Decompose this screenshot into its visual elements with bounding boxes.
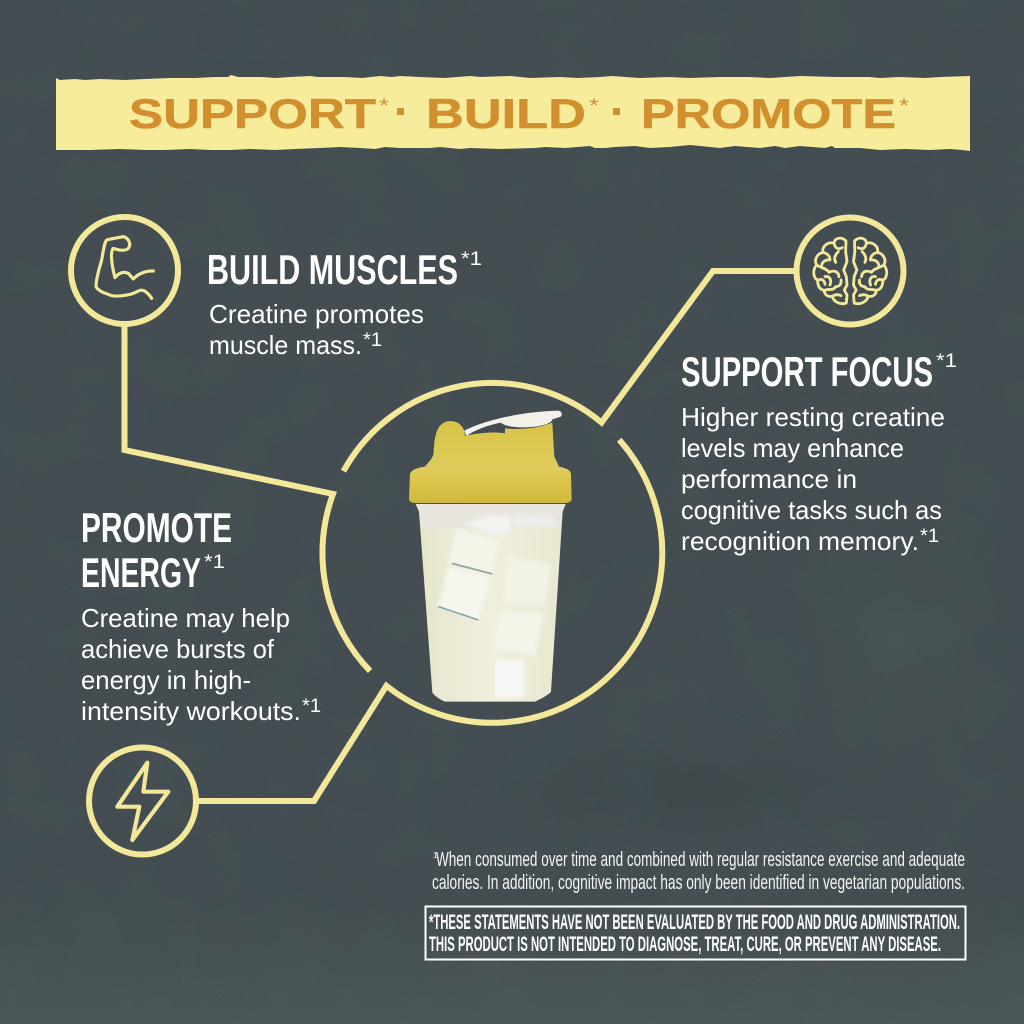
ice cubes bbox=[438, 515, 557, 655]
disclaimer box bbox=[426, 906, 966, 960]
text: support focus: recognition memory. bbox=[681, 526, 919, 556]
heading: PROMOTE bbox=[81, 504, 232, 551]
body: Creatine promotes bbox=[209, 299, 424, 329]
shaker bottle bbox=[409, 411, 572, 702]
text: promote energy: achieve bursts of bbox=[81, 634, 275, 664]
heading: BUILD MUSCLES bbox=[207, 246, 458, 293]
body: Higher resting creatine bbox=[681, 402, 945, 432]
text: promote energy: energy in high- bbox=[81, 665, 251, 695]
banner: * bbox=[899, 96, 910, 117]
text: promote energy: intensity workouts. bbox=[81, 696, 301, 726]
body: Creatine may help bbox=[81, 603, 290, 633]
icon: flexed arm bbox=[71, 217, 178, 324]
text: promote energy: *1 bbox=[302, 696, 321, 717]
lid bbox=[422, 421, 561, 471]
icon: lightning bolt bbox=[89, 748, 196, 854]
banner title: SUPPORT bbox=[129, 90, 376, 137]
footnote: 1 bbox=[433, 851, 438, 860]
text: build muscles: *1 bbox=[363, 330, 382, 351]
text: build muscles: muscle mass. bbox=[209, 330, 362, 360]
footnote bbox=[432, 849, 965, 894]
banner: BUILD bbox=[426, 90, 586, 137]
banner strip bbox=[56, 75, 970, 151]
text: promote energy: *1 bbox=[204, 552, 225, 573]
text: promote energy: ENERGY bbox=[81, 549, 201, 596]
banner: * bbox=[589, 96, 600, 117]
text: support focus bbox=[681, 348, 957, 556]
banner: PROMOTE bbox=[641, 90, 896, 137]
text: support focus: performance in bbox=[681, 464, 857, 494]
right hemisphere bbox=[854, 238, 887, 304]
text: promote energy bbox=[81, 504, 321, 726]
banner: * bbox=[379, 96, 390, 117]
banner bbox=[56, 75, 970, 151]
text: support focus: *1 bbox=[936, 351, 957, 372]
icon: brain bbox=[796, 218, 904, 324]
text: support focus: *1 bbox=[920, 526, 939, 547]
text: support focus: levels may enhance bbox=[681, 433, 904, 463]
flap bbox=[464, 411, 562, 436]
connector lines and central ring bbox=[124, 271, 796, 801]
text: build muscles bbox=[207, 246, 482, 360]
text: build muscles: *1 bbox=[461, 249, 482, 270]
left hemisphere bbox=[814, 238, 847, 304]
cup bbox=[416, 504, 566, 702]
text: support focus: cognitive tasks such as bbox=[681, 495, 942, 525]
